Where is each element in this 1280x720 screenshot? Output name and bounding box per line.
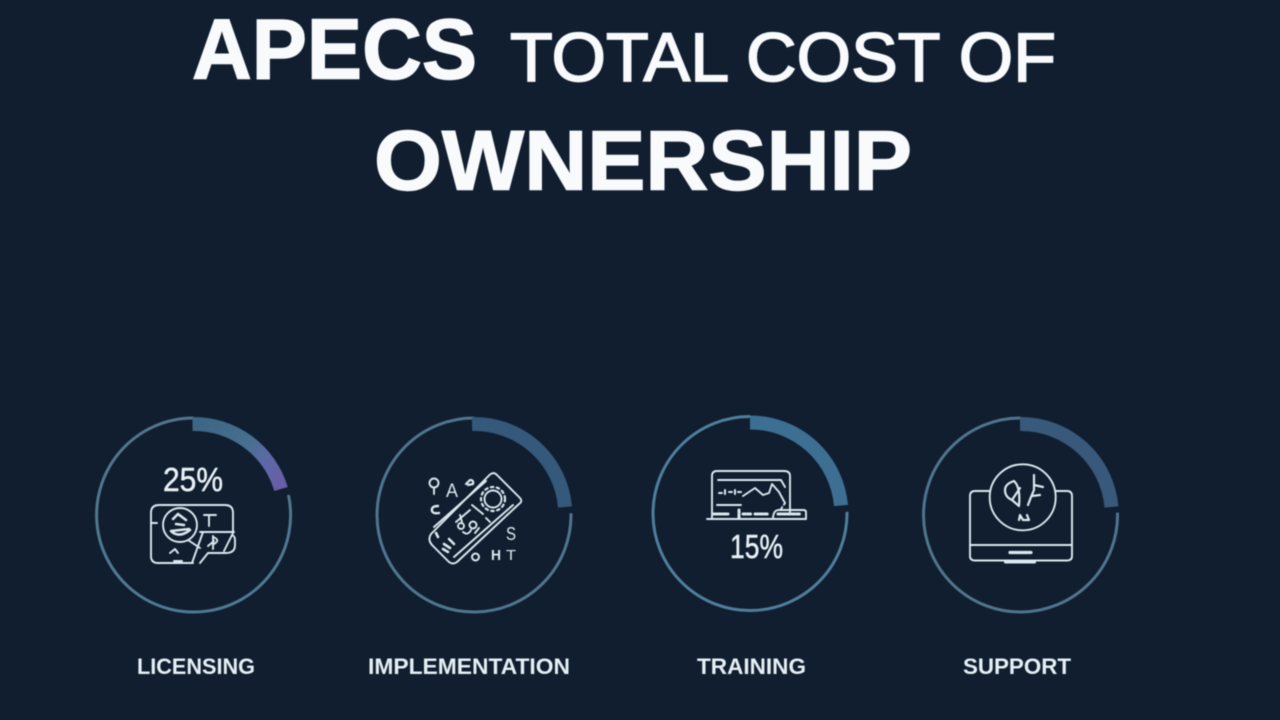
label: implementation: IMPLEMENTATION [368,654,570,679]
icon: implementation tool [429,473,521,564]
label: licensing: LICENSING [137,654,255,679]
progress arc [750,422,841,506]
ring track [97,418,291,612]
icon: implementation tool: H [491,547,501,564]
progress arc [472,424,565,507]
percentage: 25%: 25% [163,461,223,498]
ring track [924,418,1118,612]
label: support: SUPPORT [963,654,1072,679]
percentage: 15%: 15% [730,528,783,565]
title word: ownership: OWNERSHIP [374,114,912,208]
panel: training [653,416,847,679]
icon: support laptop [970,464,1072,562]
progress arc [1020,424,1112,507]
ring track [377,418,571,612]
ring track [653,416,847,610]
panel: support [924,418,1118,679]
icon: implementation tool: S [506,524,516,544]
progress arc [192,424,281,489]
title words: total cost of: TOTAL COST OF [510,19,1056,96]
panel: implementation [368,418,571,679]
panel: licensing [97,418,291,679]
title word: APECS: APECS [192,2,477,98]
label: training: TRAINING [697,654,806,679]
icon: license document [151,505,235,563]
icon: implementation tool: A [446,481,458,502]
icon: implementation tool: T [506,547,516,564]
icon: training screen [707,471,806,519]
title [192,2,1056,208]
